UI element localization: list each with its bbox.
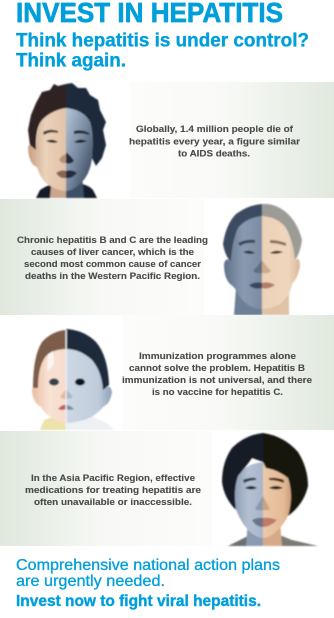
- medications text: medications for treating hepatitis are: [25, 484, 201, 495]
- closing call to action: [16, 557, 280, 610]
- immunization text: cannot solve the problem. Hepatitis B: [129, 362, 305, 373]
- cancer text: second most common cause of cancer: [24, 258, 201, 269]
- portrait: woman: [222, 433, 318, 546]
- panel background: [0, 431, 212, 546]
- action plans statement: [16, 557, 280, 590]
- subtitle: Think again.: [16, 50, 126, 72]
- invest now statement: Invest now to fight viral hepatitis.: [16, 593, 261, 610]
- medications text: [25, 472, 201, 507]
- cancer text: Chronic hepatitis B and C are the leading: [17, 234, 208, 245]
- subtitle: [16, 30, 309, 72]
- cancer text: causes of liver cancer, which is the: [31, 246, 194, 257]
- medications text: often unavailable or inaccessible.: [34, 496, 192, 507]
- panel: global deaths: [28, 82, 334, 198]
- immunization text: is no vaccine for hepatitis C.: [152, 386, 283, 397]
- panel background: [122, 315, 334, 430]
- panel background: [0, 199, 204, 315]
- statistic text: [129, 123, 300, 158]
- action plans statement: Comprehensive national action plans: [16, 557, 280, 574]
- panel: immunization: [32, 315, 334, 430]
- portrait: young man: [28, 83, 106, 198]
- statistic text: Globally, 1.4 million people die of: [136, 123, 294, 134]
- panel: medications: [0, 431, 318, 546]
- cancer text: deaths in the Western Pacific Region.: [25, 270, 200, 281]
- immunization text: Immunization programmes alone: [139, 350, 296, 361]
- panel background: [130, 82, 334, 198]
- portrait: baby: [32, 329, 114, 430]
- immunization text: [122, 350, 312, 397]
- subtitle: Think hepatitis is under control?: [16, 30, 309, 52]
- statistic text: to AIDS deaths.: [178, 148, 250, 158]
- statistic text: hepatitis every year, a figure similar: [129, 136, 300, 146]
- immunization text: immunization is not universal, and there: [122, 374, 312, 385]
- panel: liver cancer: [0, 199, 302, 315]
- action plans statement: are urgently needed.: [16, 573, 165, 590]
- portrait: older man: [223, 204, 302, 315]
- medications text: In the Asia Pacific Region, effective: [31, 472, 195, 483]
- cancer text: [17, 234, 208, 281]
